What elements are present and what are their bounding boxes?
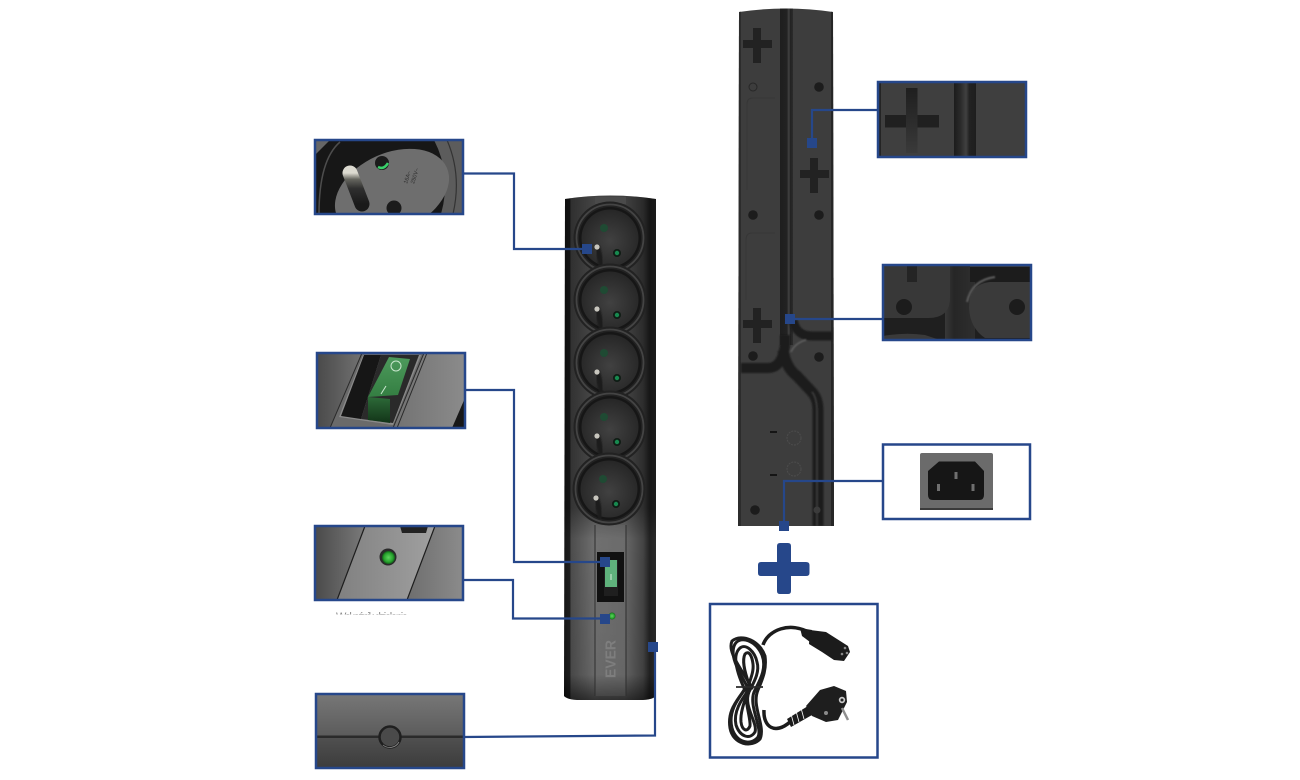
callout: LED close-up — [315, 526, 463, 600]
rocker switch — [597, 552, 624, 602]
connector lines — [463, 110, 883, 737]
callout: socket close-up: 16A~ — [403, 170, 413, 185]
keyhole mount 2 — [800, 158, 829, 193]
keyhole mount 3 — [743, 308, 772, 343]
callout: socket close-up: 250V~ — [410, 167, 421, 185]
callout: switch close-up — [317, 353, 465, 428]
socket necks — [592, 238, 628, 490]
icon: plus sign — [758, 543, 810, 594]
central channel — [780, 0, 793, 345]
Schuko plug — [787, 686, 848, 727]
strip body — [564, 196, 656, 700]
clipped caption fragment: Wskaźnik działania — [336, 611, 409, 623]
connector end markers — [582, 138, 817, 652]
screw dots — [748, 82, 824, 515]
product: back of power strip — [738, 0, 834, 530]
callout: IEC inlet close-up — [883, 444, 1030, 519]
callout: socket close-up — [314, 138, 464, 216]
coil tie — [736, 686, 763, 688]
moulded panels — [747, 98, 775, 190]
keyhole mount 1 — [743, 28, 772, 63]
socket 2 — [574, 264, 646, 336]
callout: groove close-up — [883, 265, 1031, 340]
socket 1 — [574, 202, 646, 274]
centre panel — [595, 525, 626, 696]
EVER logo: EVER — [602, 640, 620, 678]
callout: side button close-up — [316, 694, 464, 768]
cord leads — [763, 627, 810, 645]
Y grooves — [741, 320, 833, 526]
socket 4 — [574, 390, 646, 464]
IEC plug connector — [800, 628, 850, 661]
power indicator LED — [608, 612, 616, 620]
socket 5 — [572, 452, 646, 526]
socket 3 — [574, 326, 646, 400]
top centre tab — [595, 197, 626, 204]
panel: power cord — [710, 604, 878, 758]
callout: keyhole close-up — [878, 82, 1026, 157]
embossed label marks — [770, 431, 801, 476]
edges — [738, 0, 741, 530]
cord coil — [729, 638, 765, 744]
product: front of power strip — [564, 196, 656, 700]
